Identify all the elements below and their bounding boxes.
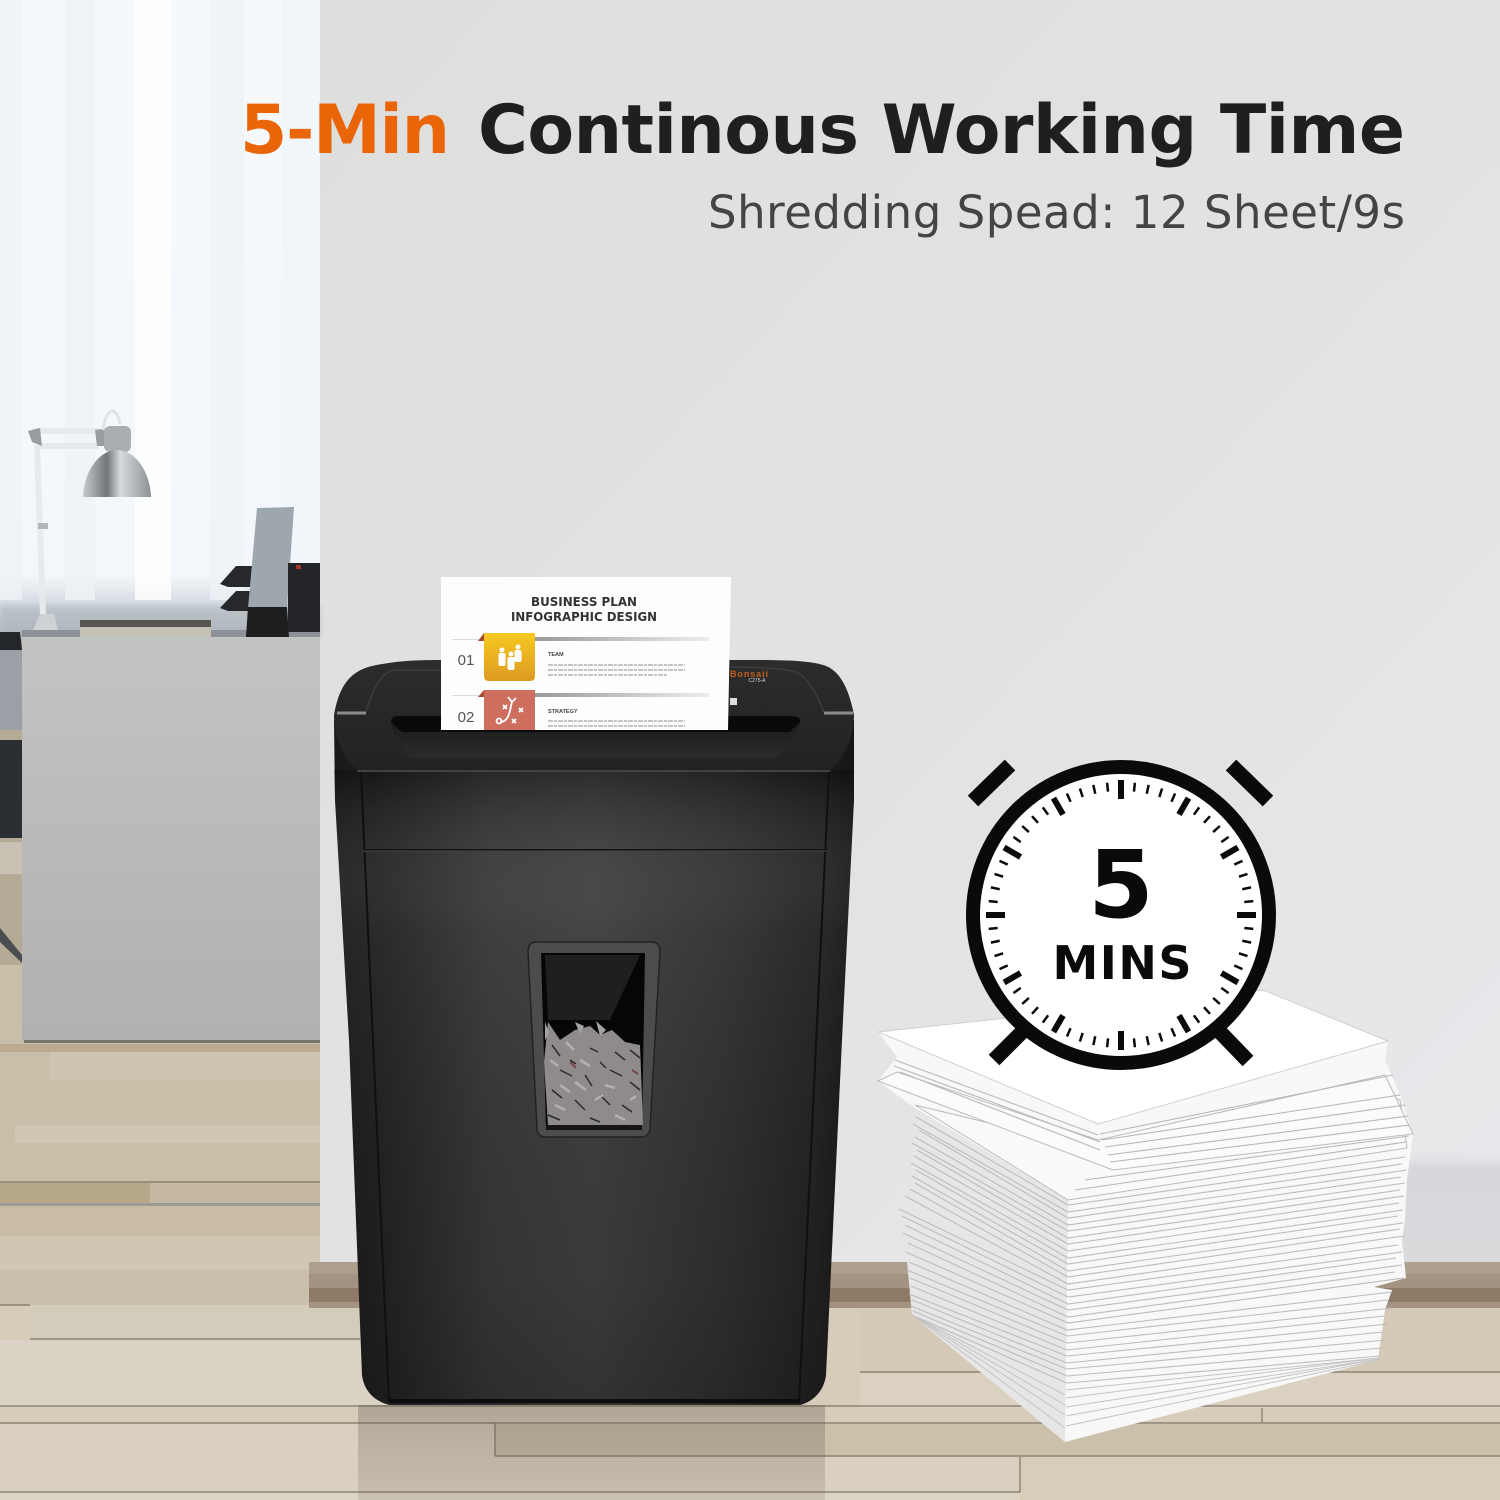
desk monitor	[246, 507, 320, 637]
document item 01	[458, 633, 564, 681]
paper stack	[878, 990, 1413, 1442]
background: floor	[0, 965, 1500, 1500]
shredder window frame	[528, 942, 660, 1137]
clock unit label: MINS	[1052, 936, 1192, 990]
clock alarm bells and legs	[973, 765, 1268, 1061]
icon: strategy	[496, 697, 523, 724]
background: dark chair	[0, 632, 24, 970]
shredder brand mark	[730, 669, 768, 705]
desk lamp	[28, 411, 151, 630]
lid highlights	[337, 667, 853, 771]
shredder	[334, 660, 854, 1405]
background: left office window and curtains	[0, 0, 320, 640]
window bottom lip	[546, 1125, 642, 1130]
document sheet	[441, 577, 731, 730]
stack body	[878, 990, 1413, 1442]
paper shreds	[544, 1021, 643, 1125]
shredder reflection on floor	[358, 1405, 825, 1500]
stack top sheet	[878, 990, 1388, 1124]
icon: team	[498, 644, 522, 670]
shredder body shading	[334, 770, 854, 1405]
clock major ticks	[986, 780, 1256, 1050]
icon: alarm clock	[973, 765, 1269, 1063]
stack sheet edges	[899, 1117, 1407, 1383]
background: lower wall shade	[1390, 1150, 1500, 1265]
background: desk	[22, 630, 320, 1043]
document item 02	[458, 690, 578, 730]
document item 02: STRATEGY	[548, 709, 578, 715]
shredder body seams	[361, 772, 829, 1402]
document item 01: 01	[458, 652, 474, 669]
title: 5-Min	[240, 91, 450, 170]
title: Continous Working Time	[478, 91, 1405, 170]
clock face	[973, 767, 1269, 1063]
shredder paper slot	[391, 718, 800, 758]
window light reflection	[545, 955, 640, 1020]
shredder brand mark: C275-A	[749, 678, 766, 684]
desk paper trays	[220, 566, 255, 611]
stack lower fan sheets	[912, 1315, 1379, 1428]
document heading	[511, 595, 657, 624]
document filler text lines	[548, 665, 685, 726]
document heading: INFOGRAPHIC DESIGN	[511, 610, 657, 624]
background: baseboard	[309, 1262, 1500, 1308]
document being shredded	[441, 577, 731, 730]
document item 02: 02	[458, 709, 474, 726]
shredder body	[334, 720, 854, 1405]
shredder brand mark: Bonsaii	[730, 669, 768, 679]
clock minor ticks	[989, 783, 1253, 1047]
desk book	[80, 620, 211, 637]
document dividers	[535, 637, 710, 641]
clock number: 5	[1088, 831, 1154, 940]
stack upper sheets	[915, 1090, 1407, 1200]
shredder window glass	[541, 953, 645, 1130]
subtitle: Shredding Spead: 12 Sheet/9s	[708, 186, 1405, 239]
document heading: BUSINESS PLAN	[531, 595, 637, 609]
stack left face shade	[897, 1108, 1068, 1442]
background: wall	[320, 0, 1500, 1265]
shredder lid	[334, 660, 854, 770]
document item 01: TEAM	[548, 652, 564, 658]
